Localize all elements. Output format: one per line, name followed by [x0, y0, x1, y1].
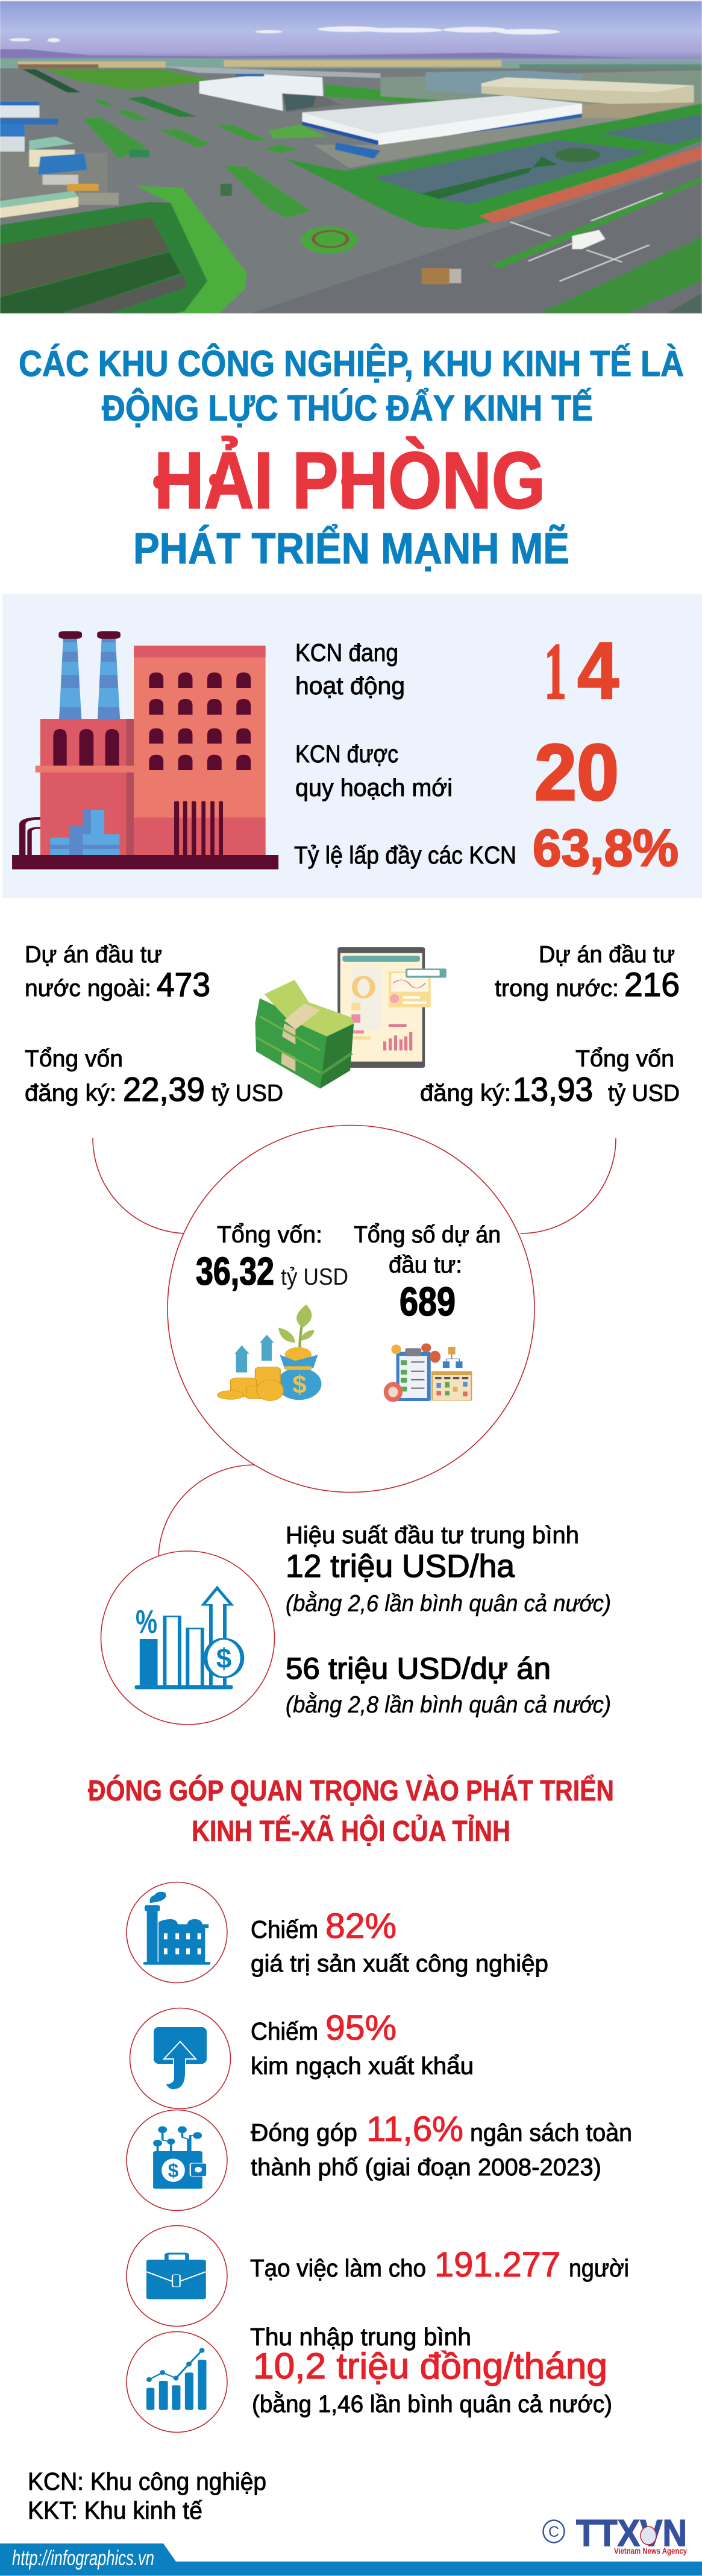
stat: occupancy rate: Tỷ lệ lấp đầy các KCN	[294, 841, 516, 869]
text: average investment efficiency: Hiệu suất đầu tư trung bình	[286, 1522, 579, 1549]
text: total capital: 36,32	[196, 1249, 274, 1293]
title line 4: PHÁT TRIỂN MẠNH MẼ	[133, 524, 569, 573]
efficiency circle	[101, 1551, 275, 1725]
icon: project checklist	[384, 1343, 471, 1402]
text: 11,6%: ngân sách toàn	[470, 2119, 632, 2146]
text: total projects: Tổng số dự án	[354, 1222, 501, 1248]
stat: operating parks: KCN đang	[295, 639, 398, 666]
text: total projects	[354, 1222, 501, 1324]
stat: newly planned parks	[295, 728, 619, 816]
stat: occupancy rate	[294, 819, 678, 877]
road details	[490, 177, 702, 268]
icon: growth chart with dollar: %	[136, 1603, 157, 1640]
stat: newly planned parks: 20	[534, 728, 619, 816]
icon: money bag with coins: $	[292, 1370, 307, 1399]
text block: foreign investment: đăng ký:	[25, 1080, 116, 1106]
stat: newly planned parks: KCN được	[295, 740, 398, 768]
stat: operating parks: 4	[577, 626, 619, 716]
item: export turnover	[130, 2008, 474, 2109]
logo: TTXVN: TTXVN	[576, 2513, 687, 2554]
text block: domestic investment: 216	[624, 965, 680, 1003]
text block: foreign investment: Tổng vốn	[25, 1046, 123, 1072]
icon: growth chart with dollar	[135, 1588, 242, 1689]
text block: foreign investment: 22,39	[123, 1070, 205, 1108]
footer bar	[0, 2543, 702, 2576]
text block: domestic investment: Dự án đầu tư	[539, 942, 675, 968]
stat: newly planned parks: quy hoạch mới	[295, 774, 453, 801]
section heading: contributions: KINH TẾ-XÃ HỘI CỦA TỈNH	[192, 1814, 510, 1847]
text: 82%	[251, 1907, 548, 1977]
text block: domestic investment	[420, 942, 680, 1108]
text: 10,2 million: 10,2 triệu đồng/tháng	[253, 2346, 607, 2386]
text: total projects: 689	[400, 1279, 456, 1324]
text: 10,2 million: (bằng 1,46 lần bình quân cả nước)	[252, 2390, 612, 2418]
text: 11,6%: 11,6%	[366, 2110, 463, 2149]
panel: investment efficiency	[101, 1522, 611, 1725]
item: budget contribution	[127, 2110, 632, 2210]
footer url: http://infographics.vn	[12, 2546, 154, 2570]
text block: domestic investment: 13,93	[513, 1070, 593, 1108]
icon: digital wallet: $	[168, 2160, 179, 2181]
text: 95%: kim ngạch xuất khẩu	[251, 2053, 474, 2079]
legend: abbreviations	[28, 2468, 266, 2524]
stat: operating parks: 1	[544, 627, 566, 716]
text: 95%: 95%	[325, 2008, 396, 2048]
title line 2: ĐỘNG LỰC THÚC ĐẨY KINH TẾ	[102, 388, 593, 428]
text: 82%: giá trị sản xuất công nghiệp	[251, 1951, 548, 1977]
cream far-right factory	[425, 71, 582, 95]
text: 95%: Chiếm	[251, 2017, 318, 2045]
far green field	[43, 69, 215, 90]
icon: factory smoke	[143, 1892, 210, 1965]
logo: TTXVN: Vietnam News Agency	[614, 2546, 687, 2556]
hero photo: industrial park aerial view	[0, 0, 702, 313]
text block: foreign investment	[25, 942, 283, 1108]
icon: briefcase	[146, 2254, 206, 2299]
text: 82%: 82%	[325, 1907, 396, 1946]
text block: foreign investment: Dự án đầu tư	[25, 942, 162, 968]
text block: domestic investment: đăng ký:	[420, 1080, 511, 1106]
text block: domestic investment: tỷ USD	[608, 1080, 680, 1106]
title	[19, 343, 684, 573]
icon: money bag with coins	[218, 1305, 321, 1401]
text: average investment efficiency: (bằng 2,6 lần bình quân cả nước)	[286, 1591, 611, 1617]
centre medians	[224, 166, 311, 218]
bottom-left grass and pond	[136, 186, 246, 313]
icon: growth chart with dollar: $	[216, 1643, 231, 1674]
stat: operating parks	[295, 626, 619, 716]
item: jobs created	[127, 2226, 629, 2326]
text: total projects: đầu tư:	[389, 1252, 462, 1278]
text: total capital: tỷ USD	[281, 1264, 348, 1290]
text: average investment efficiency	[286, 1522, 611, 1718]
text: average investment efficiency: 12 triệu USD/ha	[286, 1549, 515, 1584]
legend: abbreviations: KCN: Khu công nghiệp	[28, 2468, 266, 2495]
section heading: contributions: ĐÓNG GÓP QUAN TRỌNG VÀO PHÁT TRIỂN	[88, 1774, 614, 1807]
left-side buildings	[0, 152, 107, 199]
text: 191.277: Tạo việc làm cho	[250, 2254, 426, 2282]
connector arc: foreign to total	[93, 1138, 188, 1233]
dike and ponds	[284, 104, 702, 230]
text: 11,6%: thành phố (giai đoạn 2008-2023)	[251, 2154, 601, 2181]
text block: foreign investment: nước ngoài:	[25, 976, 151, 1001]
text: average investment efficiency: 56 triệu USD/dự án	[286, 1652, 551, 1685]
trucks	[422, 268, 450, 284]
icon: export arrow	[154, 2027, 207, 2090]
logo: TTXVN: C	[548, 2524, 559, 2540]
panel: industrial park counts	[2, 594, 702, 898]
legend: abbreviations: KKT: Khu kinh tế	[28, 2496, 202, 2524]
connector arc: domestic to total	[521, 1138, 616, 1233]
text: 10,2 million	[250, 2323, 612, 2418]
text: total capital	[196, 1222, 348, 1293]
logo: TTXVN	[544, 2513, 687, 2556]
icon: rising bars	[146, 2348, 207, 2410]
text block: domestic investment: trong nước:	[495, 976, 619, 1001]
white building	[199, 74, 323, 111]
text: 95%	[251, 2008, 474, 2079]
text: 82%: Chiếm	[251, 1916, 318, 1943]
text: average investment efficiency: (bằng 2,8 lần bình quân cả nước)	[286, 1692, 611, 1718]
text: 191.277: 191.277	[434, 2245, 560, 2284]
icon: digital wallet	[153, 2126, 207, 2189]
item: industrial output	[127, 1882, 548, 1982]
section heading: contributions	[88, 1774, 614, 1847]
connector arc: total to efficiency	[158, 1465, 255, 1559]
panel: totals circle	[168, 1126, 534, 1492]
stat: occupancy rate: 63,8%	[533, 819, 678, 877]
text: 191.277	[250, 2245, 629, 2284]
text: 191.277: người	[569, 2254, 629, 2282]
title city name: HẢI PHÒNG	[154, 436, 545, 525]
item: average income	[127, 2323, 612, 2432]
road markings	[510, 193, 663, 281]
text: total capital: Tổng vốn:	[217, 1222, 322, 1248]
text: 11,6%: Đóng góp	[251, 2119, 357, 2146]
icon: tablet and banknotes	[255, 947, 447, 1089]
icon: factory	[12, 631, 278, 870]
text block: domestic investment: Tổng vốn	[575, 1046, 674, 1072]
text block: foreign investment: tỷ USD	[212, 1080, 283, 1106]
text: 10,2 million: Thu nhập trung bình	[250, 2323, 471, 2351]
big warehouse	[302, 95, 582, 134]
text block: foreign investment: 473	[157, 965, 210, 1003]
text: 11,6%	[251, 2110, 632, 2181]
stat: operating parks: hoạt động	[295, 672, 405, 700]
